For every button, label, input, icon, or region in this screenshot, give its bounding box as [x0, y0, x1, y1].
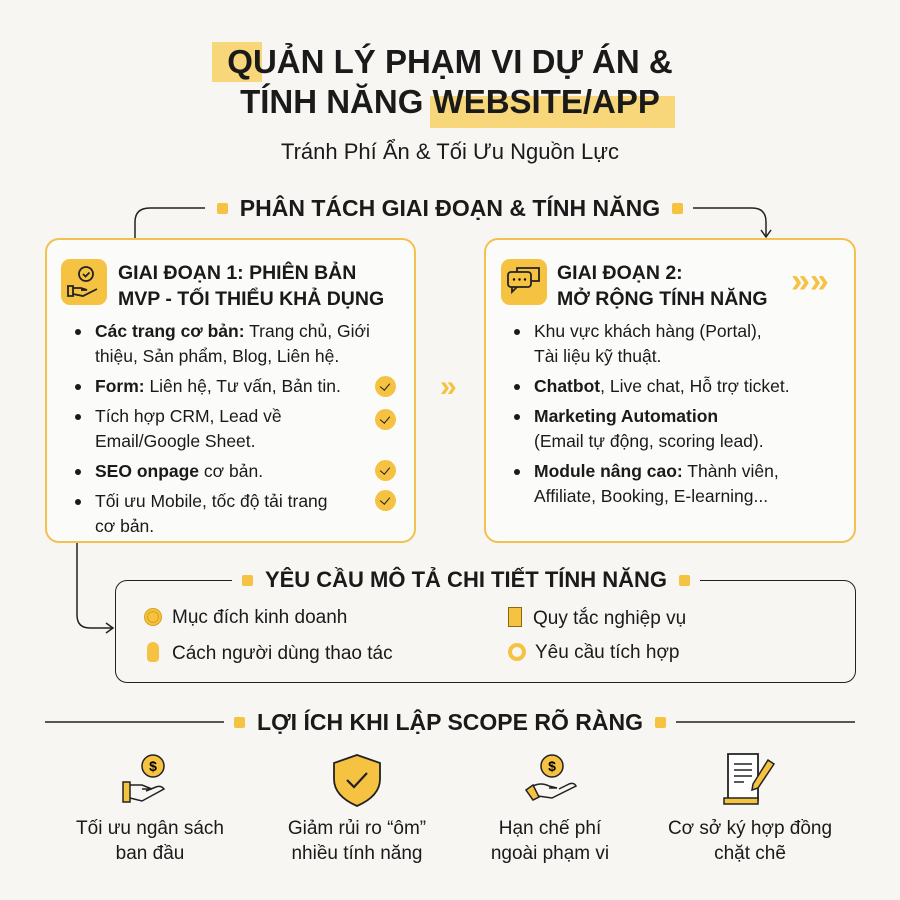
item: mục đích: Mục đích kinh doanh — [172, 607, 347, 628]
text: Giảm rủi ro “ôm” — [288, 818, 426, 839]
list: cơ bản. — [95, 516, 154, 536]
title: QUẢN LÝ PHẠM VI DỰ ÁN & — [227, 43, 673, 80]
text: ngoài phạm vi — [491, 843, 609, 864]
list: Form: Liên hệ, Tư vấn, Bản tin. — [95, 376, 341, 396]
list: Module nâng cao: Thành viên, — [534, 461, 779, 481]
labels — [76, 818, 224, 864]
panel: yêu cầu mô tả — [115, 580, 856, 683]
list: Các trang cơ bản: Trang chủ, Giới — [95, 321, 370, 341]
list — [75, 321, 370, 536]
list: Affiliate, Booking, E-learning... — [534, 486, 768, 506]
icon: shield — [333, 754, 381, 807]
item: quy tắc: Quy tắc nghiệp vụ — [533, 608, 686, 629]
item: tích hợp: Yêu cầu tích hợp — [535, 642, 680, 663]
icon: chat — [501, 259, 547, 305]
list: (Email tự động, scoring lead). — [534, 431, 764, 451]
list: SEO onpage cơ bản. — [95, 461, 263, 481]
list — [514, 321, 790, 506]
title — [212, 42, 675, 128]
icon: coin hand 2 — [525, 754, 577, 801]
title: TÍNH NĂNG WEBSITE/APP — [240, 83, 660, 120]
icon: hand check — [61, 259, 107, 305]
panel: giai đoạn 1: MVP - TỐI THIỂU KHẢ DỤNG — [118, 288, 384, 310]
icon: coin hand 2: $ — [548, 758, 556, 774]
list: Khu vực khách hàng (Portal), — [534, 321, 762, 341]
section header: lợi ích: LỢI ÍCH KHI LẬP SCOPE RÕ RÀNG — [257, 709, 643, 735]
panel: giai đoạn 1: GIAI ĐOẠN 1: PHIÊN BẢN — [118, 262, 356, 284]
text: Cơ sở ký hợp đồng — [668, 818, 832, 839]
list: Chatbot, Live chat, Hỗ trợ ticket. — [534, 376, 790, 396]
list: Email/Google Sheet. — [95, 431, 256, 451]
panel: giai đoạn 2 — [484, 238, 856, 543]
panel: giai đoạn 1 — [45, 238, 416, 543]
list: thiệu, Sản phẩm, Blog, Liên hệ. — [95, 346, 339, 366]
labels: ban đầu — [116, 843, 184, 864]
subtitle: Tránh Phí Ẩn & Tối Ưu Nguồn Lực — [281, 139, 619, 164]
panel: giai đoạn 2: MỞ RỘNG TÍNH NĂNG — [557, 288, 768, 310]
text: chặt chẽ — [714, 843, 786, 864]
section header: phân tách: PHÂN TÁCH GIAI ĐOẠN & TÍNH NĂNG — [240, 195, 660, 221]
arrow: chevrons: » — [440, 370, 457, 403]
icon: coin hand 1 — [122, 754, 166, 803]
heading: yêu cầu: YÊU CẦU MÔ TẢ CHI TIẾT TÍNH NĂNG — [265, 567, 667, 592]
chevrons: »» — [791, 262, 829, 300]
text: nhiều tính năng — [291, 843, 422, 864]
labels: Tối ưu ngân sách — [76, 818, 224, 839]
icon: contract — [723, 753, 775, 805]
icon: coin hand 1: $ — [149, 758, 157, 774]
panel: giai đoạn 2: GIAI ĐOẠN 2: — [557, 262, 683, 284]
list: Tối ưu Mobile, tốc độ tải trang — [95, 491, 328, 511]
list: Marketing Automation — [534, 406, 718, 426]
list: Tích hợp CRM, Lead về — [95, 406, 282, 426]
list: Tài liệu kỹ thuật. — [534, 346, 661, 366]
text: Hạn chế phí — [499, 818, 601, 839]
item: cách người dùng: Cách người dùng thao tác — [172, 643, 393, 664]
